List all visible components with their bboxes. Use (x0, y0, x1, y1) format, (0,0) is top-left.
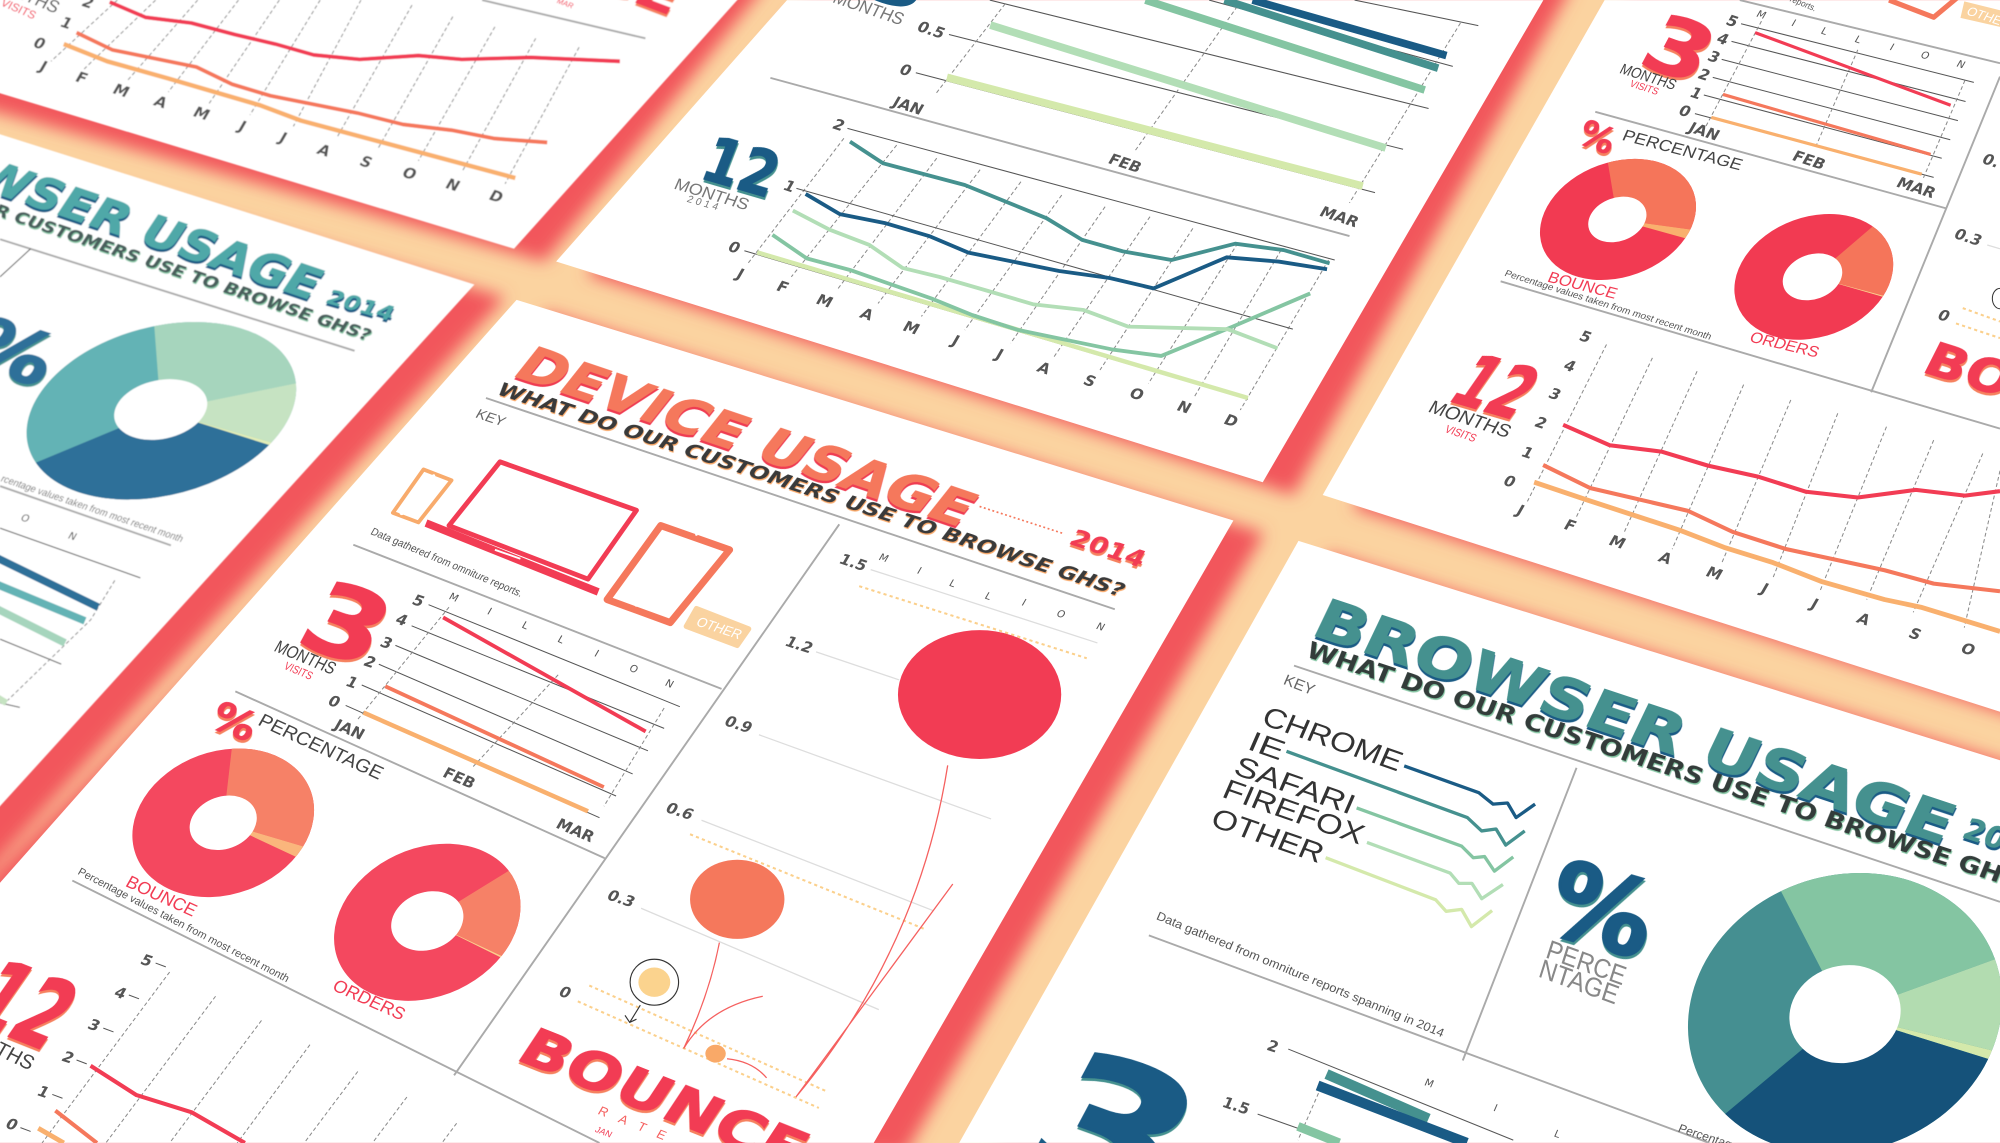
line: peach series (64, 44, 515, 178)
label: months: MONTHS (1425, 398, 1515, 442)
donut: bounce (1540, 158, 1696, 280)
twelve month labels: 5 (1576, 327, 1595, 346)
chart letters (18, 513, 78, 543)
note: percentage values: rcentage values taken from most recent month (0, 474, 185, 545)
twelve month labels: 2 (829, 116, 848, 135)
twelve month labels: 3 (85, 1016, 104, 1035)
twelve month labels: O (1126, 384, 1147, 404)
three month labels: M (447, 592, 460, 605)
three month labels: 0.5 (914, 18, 948, 42)
note: percentage values: Percentage values taken from most recent month (76, 866, 291, 985)
chart labels: 1.5 (1220, 1093, 1253, 1118)
three month grid (1695, 24, 1974, 177)
twelve month labels: 0 (725, 238, 744, 257)
year: 2014 (1065, 523, 1152, 573)
three month labels: 5 (409, 591, 428, 610)
twelve month labels: D (1221, 411, 1242, 431)
legend labels (1207, 701, 1408, 869)
label: percentage: PERCENTAGE (254, 711, 387, 784)
big number 3: 3 (1626, 0, 1731, 103)
label: bounce: BOUNCE (1545, 269, 1620, 303)
chart labels: M (1422, 1078, 1435, 1091)
bubble chart dotted guides (578, 586, 1087, 1108)
three month labels: FEB (1789, 147, 1829, 173)
twelve month labels: A (1034, 359, 1054, 378)
label: months: MONTHS (671, 175, 752, 214)
bubble: tiny orange (705, 1045, 726, 1063)
three month labels: L (555, 634, 566, 646)
note: percentage values: Percentage values taken from most recent month (1502, 268, 1713, 342)
twelve month labels: F (773, 278, 792, 297)
twelve month labels: 3 (1545, 385, 1564, 404)
three month labels: 0 (1675, 102, 1694, 121)
donut: browser share (26, 322, 297, 500)
twelve month dashed columns (1527, 344, 2000, 628)
percent glyph: % (1533, 838, 1670, 983)
panel: bottom-right browser sheet (959, 541, 2000, 1143)
three month labels: JAN (1684, 119, 1723, 144)
axis labels: J (234, 117, 249, 135)
three month labels: 3 (377, 634, 396, 652)
three month labels: 2 (360, 653, 379, 672)
panel: top-right device sheet (1323, 0, 2000, 712)
chart dashed column (1298, 1087, 1321, 1140)
chart dashed column (8, 580, 115, 700)
panel: top-left device sheet (0, 0, 749, 249)
three month labels: I (485, 607, 493, 618)
bubble chart labels: L (947, 578, 958, 590)
axis labels: N (442, 175, 463, 195)
bubble chart labels: I (915, 566, 923, 577)
three month labels: 5 (1723, 12, 1742, 31)
twelve month labels: 1 (780, 177, 799, 196)
percent glyph: % (1571, 113, 1623, 163)
donut: orders (334, 844, 521, 1001)
label: ntage: NTAGE (1536, 953, 1623, 1010)
bubble: small peach with outline (625, 959, 679, 1022)
label: other: OTHER (694, 614, 745, 642)
twelve month labels: 4 (1560, 357, 1579, 376)
note: source: Data gathered from omniture reports. (368, 526, 525, 600)
three month labels: N (1954, 59, 1967, 71)
label: months: MONTHS (1617, 61, 1679, 93)
bubble: large red (898, 630, 1061, 759)
rule (482, 0, 645, 38)
axis labels: M (109, 81, 133, 101)
donut: browser share (1688, 873, 2000, 1143)
twelve month labels: S (1080, 372, 1099, 391)
chart letters: N (66, 531, 78, 543)
bubble chart labels: 0.9 (721, 713, 756, 737)
twelve month labels: J (1806, 595, 1822, 613)
donut: bounce (132, 748, 314, 898)
chart series bars (0, 556, 98, 703)
three month labels: JAN (888, 93, 927, 119)
three month labels: 4 (392, 611, 411, 630)
twelve month labels: 2 (1531, 414, 1550, 432)
big number 12: 12 (1434, 340, 1555, 436)
three month labels: L (519, 620, 530, 632)
axis labels: J (275, 129, 290, 147)
three month labels: I (1789, 19, 1798, 29)
label: jan: JAN (593, 1125, 614, 1139)
chart grid (0, 528, 140, 707)
title: BROWSER USAGE (1303, 588, 1966, 857)
three month series (1711, 33, 1951, 174)
chart labels: 2 (1264, 1037, 1281, 1056)
twelve month labels: J (732, 265, 747, 283)
three month labels: I (1887, 43, 1896, 53)
percent glyph: % (202, 693, 267, 751)
label: percentage: PERCENTAGE (1620, 126, 1746, 174)
label: bounce: BOUNCE (122, 872, 201, 920)
three month series bars (947, 0, 1446, 186)
label: visits: VISITS (282, 661, 315, 683)
three month grid (346, 605, 680, 818)
label: key: KEY (473, 406, 509, 429)
label: perce: PERCE (1543, 934, 1630, 991)
panel: center device sheet (0, 300, 1233, 1143)
three month labels: 2 (1695, 65, 1714, 84)
twelve month labels (1500, 327, 1979, 659)
three month dashed columns (358, 607, 664, 806)
twelve month labels: J (991, 345, 1007, 363)
twelve month labels: J (1756, 580, 1772, 598)
subtitle: WHAT DO OUR CUSTOMERS USE TO BROWSE GHS? (492, 379, 1130, 601)
icon: other badge (686, 608, 749, 645)
year: 2014 (321, 286, 400, 326)
label: months: MONTHS (271, 637, 340, 678)
three month labels (888, 18, 1362, 231)
twelve month labels: M (1703, 563, 1726, 584)
line: red series (110, 2, 620, 61)
bounce chart fragment: 0.3 (1951, 225, 1985, 249)
twelve month labels: M (899, 318, 923, 338)
big number 12: 12 (692, 123, 790, 213)
axis labels (30, 0, 507, 206)
bubble chart labels: M (876, 552, 890, 565)
three month labels: MAR (1316, 203, 1362, 231)
axis labels: 1 (57, 14, 76, 33)
axis labels: O (399, 164, 420, 183)
twelve month series (1534, 425, 2000, 631)
axis labels: M (190, 104, 213, 124)
rules and dividers (1501, 0, 2000, 429)
rule (770, 78, 1349, 236)
chart grid: twelve month dashed columns (51, 0, 579, 184)
three month labels: 1 (342, 673, 362, 692)
panel: top-center browser sheet (556, 0, 1543, 482)
year leader (980, 506, 1062, 533)
three month labels: L (1852, 35, 1863, 46)
twelve month labels: 1 (34, 1083, 53, 1101)
bubble chart labels: 0 (555, 983, 575, 1002)
axis labels: A (151, 93, 171, 112)
bubble chart labels: N (1094, 622, 1106, 633)
twelve month labels: 5 (137, 951, 156, 970)
three month labels: M (1754, 9, 1768, 22)
chart labels (1220, 1037, 1562, 1141)
chart grid (1258, 1049, 1513, 1143)
three month labels: L (1819, 26, 1830, 38)
three month labels: FEB (440, 764, 479, 792)
bubble stems (684, 765, 953, 1097)
three month labels: MAR (1893, 174, 1939, 202)
bubble chart labels: 0.3 (604, 887, 638, 911)
twelve month ticks (20, 963, 166, 1131)
twelve month labels: J (1512, 501, 1528, 519)
bubble chart labels: 1.5 (836, 551, 871, 575)
three month labels: 1 (1687, 84, 1706, 103)
three month labels: JAN (330, 716, 368, 743)
subtitle: WHAT DO OUR CUSTOMERS USE TO BROWSE GHS? (1303, 636, 2000, 899)
label: orders: ORDERS (1747, 330, 1822, 361)
donut: orders (1734, 214, 1894, 340)
three month labels: MAR (553, 815, 598, 846)
twelve month labels: 0 (1500, 472, 1519, 491)
label: visits: VISITS (1627, 79, 1661, 98)
twelve month dashed columns (42, 972, 457, 1143)
note: source: Data gathered from omniture reports spanning in 2014 (1154, 909, 1447, 1040)
bubble chart labels: O (1054, 609, 1067, 621)
axis labels: S (356, 153, 376, 172)
three month dashed columns (936, 4, 1460, 203)
legend labels: IE (1244, 726, 1290, 766)
three month labels: N (663, 678, 675, 691)
twelve month labels: J (947, 332, 963, 349)
three month labels: I (592, 649, 600, 660)
three month labels (325, 591, 675, 846)
panel: left browser sheet (0, 112, 474, 820)
twelve month series (757, 142, 1330, 398)
twelve month labels: M (1606, 532, 1629, 552)
twelve month labels: A (1853, 610, 1874, 629)
three month grid (916, 0, 1478, 193)
chart labels: L (1552, 1129, 1562, 1141)
icon: tablet (607, 526, 730, 623)
twelve month dashed columns (748, 138, 1329, 410)
twelve month labels: M (813, 291, 836, 311)
three month labels: O (1918, 50, 1931, 62)
axis labels: 0 (30, 34, 49, 53)
twelve month labels: 2 (58, 1048, 77, 1067)
twelve month labels: S (1905, 625, 1925, 644)
label: visits: VISITS (1442, 424, 1479, 445)
three month labels: FEB (1105, 151, 1145, 176)
bubble chart grid (641, 570, 1097, 1010)
three month labels: O (627, 663, 640, 676)
bubble chart labels: 0.6 (662, 799, 697, 823)
twelve month labels: A (857, 305, 877, 324)
rules and dividers (72, 398, 1115, 1143)
twelve month labels: N (1174, 398, 1195, 417)
three month labels (1675, 9, 1967, 202)
chart letters: O (18, 513, 31, 525)
divider (0, 249, 31, 277)
twelve month labels: O (1957, 640, 1979, 659)
bubble chart labels: 1.2 (782, 633, 816, 657)
three month dashed columns (1704, 21, 1965, 180)
label: orders: ORDERS (329, 976, 409, 1024)
twelve month grid (744, 128, 1335, 399)
rules (0, 239, 355, 545)
rules and divider (1149, 666, 2000, 1143)
three month labels: 3 (1704, 48, 1723, 66)
twelve month series (38, 1066, 245, 1143)
chart series bars (1298, 1074, 1467, 1143)
bounce chart fragment: 0 (1934, 306, 1953, 325)
legend labels: FIREFOX (1218, 774, 1370, 850)
legend lines (1286, 751, 1535, 927)
three month labels: 4 (1713, 30, 1732, 49)
twelve month labels: 4 (111, 984, 130, 1003)
twelve month labels (2, 951, 156, 1134)
three month series (364, 617, 646, 811)
legend labels: CHROME (1258, 701, 1408, 777)
icon: tablet fragment (1889, 0, 1960, 17)
twelve month labels: 1 (1518, 444, 1537, 462)
chart labels: I (1492, 1103, 1499, 1114)
axis labels: D (486, 187, 507, 206)
axis labels: F (72, 69, 91, 87)
label: 2014: 2014 (685, 194, 720, 213)
bubble chart labels: I (1019, 598, 1028, 609)
bubble chart labels: L (982, 591, 994, 603)
big number 3: 3 (282, 560, 411, 690)
twelve month labels (725, 116, 1242, 431)
twelve month labels: A (1655, 549, 1676, 568)
bubble: medium orange (690, 860, 784, 939)
bubble chart labels (555, 551, 1106, 1002)
label: key: KEY (1281, 672, 1317, 699)
three month labels: 0 (896, 61, 915, 80)
axis labels: A (314, 141, 334, 160)
legend labels: SAFARI (1230, 751, 1360, 820)
icon: other badge (1960, 1, 2000, 27)
axis labels: J (35, 57, 51, 75)
twelve month labels: 0 (2, 1115, 21, 1134)
icon: phone (393, 469, 452, 522)
line: orange series (77, 33, 547, 142)
legend labels: OTHER (1207, 802, 1329, 869)
three month labels: 0 (325, 692, 344, 711)
twelve month labels: F (1561, 516, 1580, 535)
icon: laptop (426, 462, 636, 592)
bounce chart fragment (1934, 151, 2000, 338)
title: DEVICE USAGE (502, 338, 989, 537)
